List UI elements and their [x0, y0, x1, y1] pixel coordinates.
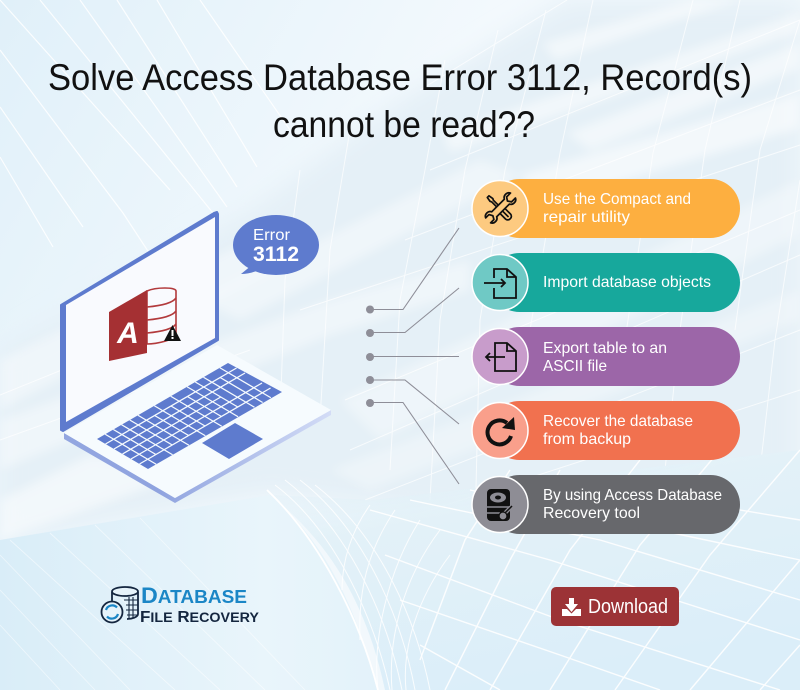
download button: Download: [588, 596, 668, 618]
lower left smooth zone: [0, 495, 377, 690]
item: export table: Export table to an: [543, 340, 667, 357]
logo: [102, 583, 259, 626]
title: [48, 57, 752, 145]
laptop illustration: [61, 212, 331, 503]
item: compact and repair: [472, 179, 740, 238]
laptop screen: [61, 212, 218, 431]
item: import objects: [472, 253, 740, 312]
keyboard: [97, 363, 282, 469]
icon: access database: A: [116, 317, 139, 350]
item: recover from backup: [472, 401, 740, 460]
item: export table: ASCII file: [543, 358, 607, 375]
item: recovery tool: Recovery tool: [543, 505, 640, 522]
laptop base: [64, 345, 331, 503]
icon: tools: [484, 191, 517, 225]
title: cannot be read??: [273, 104, 535, 145]
curved fan: [267, 480, 450, 690]
item: import objects: Import database objects: [543, 274, 711, 291]
item: recover from backup: Recover the database: [543, 413, 693, 430]
title: Solve Access Database Error 3112, Record(s): [48, 57, 752, 98]
icon: disk and key: [487, 489, 512, 521]
icon: download: [562, 598, 581, 616]
item: compact and repair: repair utility: [543, 209, 630, 226]
item: compact and repair: Use the Compact and: [543, 191, 691, 208]
speech bubble: [233, 215, 319, 275]
item: recovery tool: [472, 475, 740, 534]
icon: import file: [484, 269, 516, 298]
item: recover from backup: from backup: [543, 431, 631, 448]
lower right grid: [270, 450, 800, 690]
logo: FILE RECOVERY: [140, 609, 259, 626]
icon: warning: [164, 325, 181, 341]
connector lines: [366, 228, 459, 484]
download button: [551, 587, 679, 626]
icon: export file: [486, 343, 516, 371]
icon: access database: [109, 288, 181, 361]
speech bubble: 3112: [253, 243, 299, 266]
item: export table: [472, 327, 740, 386]
icon: refresh: [488, 417, 515, 444]
logo: DATABASE: [141, 583, 247, 608]
item: recovery tool: By using Access Database: [543, 487, 722, 504]
touchpad: [202, 423, 263, 459]
speech bubble: Error: [253, 227, 291, 244]
icon: database logo: [102, 587, 138, 622]
